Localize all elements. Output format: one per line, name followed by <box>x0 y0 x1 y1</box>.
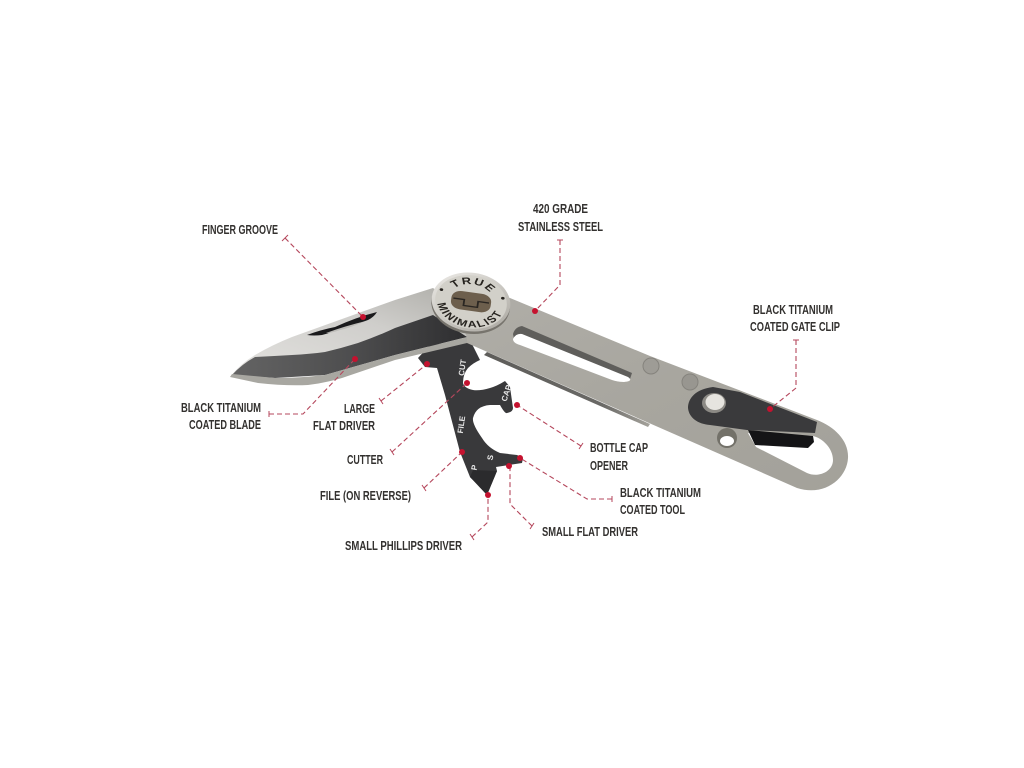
gate clip: black titanium <box>688 387 817 448</box>
callout: bottle cap opener <box>514 402 648 473</box>
tool: black titanium coated multi tool <box>418 340 523 495</box>
callout: coated tool: COATED TOOL <box>620 502 685 517</box>
callout: stainless steel: STAINLESS STEEL <box>518 219 603 234</box>
tool engravings: FILE <box>456 415 467 434</box>
callout: finger groove: FINGER GROOVE <box>202 222 278 237</box>
callout: bottle cap opener: BOTTLE CAP <box>590 440 648 455</box>
callout: coated tool: BLACK TITANIUM <box>620 485 701 500</box>
tool engravings: P <box>470 464 480 471</box>
small hole <box>717 428 737 448</box>
callout: cutter <box>347 380 470 467</box>
callout: coated tool <box>517 455 701 517</box>
lower bevel <box>484 352 650 427</box>
tool engravings: CUT <box>457 359 468 376</box>
tool engravings: CAP <box>500 383 514 403</box>
callout: large flat driver: LARGE <box>344 401 375 416</box>
finger groove <box>307 312 377 336</box>
callout: stainless steel: 420 GRADE <box>533 201 588 216</box>
handle: stainless steel frame with gate clip loop <box>450 288 848 490</box>
tool engravings: S <box>486 454 496 461</box>
pivot coin with TRUE MINIMALIST logo: MINIMALIST <box>437 302 501 328</box>
callout: small phillips driver: SMALL PHILLIPS DRIVER <box>345 538 462 553</box>
callout: gate clip <box>750 302 840 412</box>
callout: stainless steel <box>518 201 603 314</box>
callout: file <box>320 449 465 503</box>
callout: coated blade: COATED BLADE <box>189 417 261 432</box>
slot in handle <box>513 326 632 382</box>
pivot coin with TRUE MINIMALIST logo: TRUE <box>450 278 496 292</box>
callout: large flat driver: FLAT DRIVER <box>313 418 375 433</box>
callout: finger groove <box>202 222 366 320</box>
callout: coated blade: BLACK TITANIUM <box>181 400 261 415</box>
callout: small flat driver <box>506 463 638 539</box>
black coated lower blade <box>232 315 467 378</box>
callout: bottle cap opener: OPENER <box>590 458 628 473</box>
rivets <box>643 358 698 390</box>
callout: gate clip: COATED GATE CLIP <box>750 319 840 334</box>
callout: file: FILE (ON REVERSE) <box>320 488 411 503</box>
callout: large flat driver <box>313 361 430 433</box>
callout: small flat driver: SMALL FLAT DRIVER <box>542 524 638 539</box>
blade edge highlight <box>230 337 467 385</box>
tool engravings <box>456 359 514 471</box>
callout: small phillips driver <box>345 492 491 553</box>
callout: cutter: CUTTER <box>347 452 383 467</box>
blade <box>230 288 467 385</box>
callout: coated blade <box>181 356 358 432</box>
callout: gate clip: BLACK TITANIUM <box>753 302 833 317</box>
pivot coin with TRUE MINIMALIST logo <box>431 272 510 334</box>
